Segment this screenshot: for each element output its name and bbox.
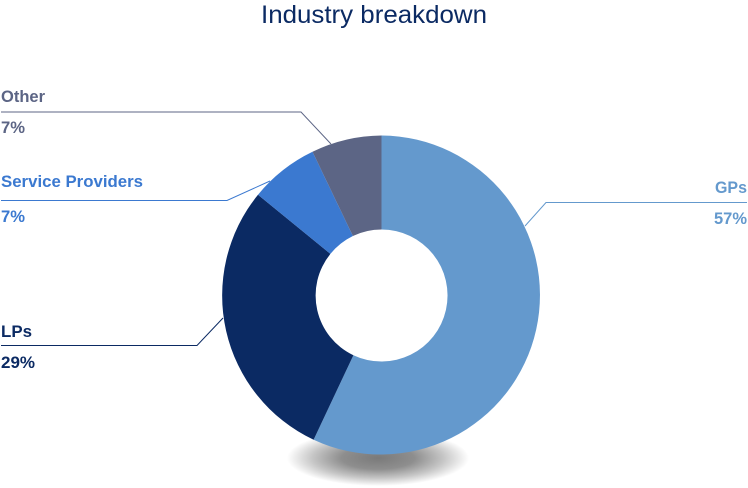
donut shadow [287,430,469,486]
donut chart [222,136,540,454]
title: Industry breakdown [261,1,487,29]
callout: Service Providers: Service Providers [1,173,143,191]
callout: Other: 7% [1,119,25,137]
callout: GPs [525,179,747,228]
callout: Service Providers [1,173,270,226]
callout: LPs [1,318,223,372]
callout: GPs: 57% [714,210,747,228]
segment: LPs 29% [222,195,353,440]
callout: Other: Other [1,88,46,106]
segment: Service Providers 7% [258,152,353,254]
callout: LPs: LPs [1,323,32,341]
callout: Other [1,88,331,144]
segment: GPs 57% [314,136,540,454]
callout: Service Providers: 7% [1,208,25,226]
callout: GPs: GPs [715,179,747,197]
segment: Other 7% [312,136,382,236]
callout: LPs: 29% [1,354,35,372]
